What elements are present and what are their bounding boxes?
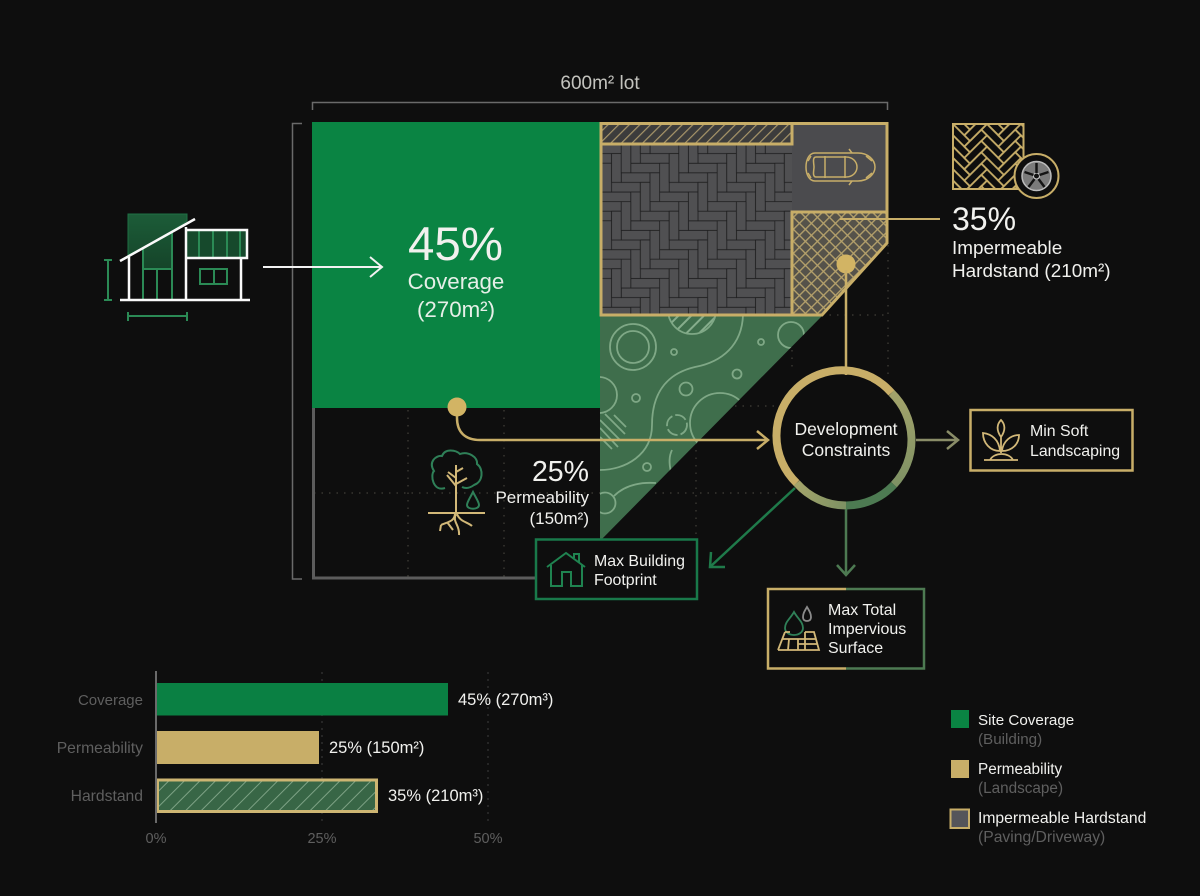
arrow: to building footprint <box>710 488 795 567</box>
bar chart <box>57 671 553 847</box>
hardstand percentage: 35% <box>952 201 1016 237</box>
connector: hardstand to constraints <box>836 254 856 375</box>
herringbone paving <box>600 144 792 315</box>
dotted grid <box>314 245 888 577</box>
axis labels <box>146 831 503 847</box>
soft landscaping label: Landscaping <box>1030 443 1120 460</box>
box: max total impervious surface <box>768 589 924 668</box>
diagram: development constraints ring <box>776 370 912 506</box>
coverage percentage: 45% <box>408 218 503 271</box>
legend <box>950 710 1146 846</box>
bar: hardstand <box>71 780 483 812</box>
legend: hardstand: (Paving/Driveway) <box>978 829 1105 846</box>
impervious surface label: Surface <box>828 640 883 657</box>
icon: seedling <box>983 420 1019 460</box>
lot width dimension <box>312 102 888 110</box>
constraints label <box>794 419 898 460</box>
bar: permeability: 25% (150m²) <box>329 739 424 757</box>
connector: coverage to constraints <box>448 398 768 449</box>
lot width label: 600m² lot <box>560 73 640 94</box>
axis labels: 25% <box>307 831 337 847</box>
building footprint label: Max Building <box>594 553 685 570</box>
bar: hardstand: Hardstand <box>71 788 143 805</box>
bar: hardstand: 35% (210m³) <box>388 787 483 805</box>
permeability percentage: 25% <box>532 456 589 488</box>
arrow: to soft landscaping <box>916 431 958 449</box>
legend: hardstand: Impermeable Hardstand <box>978 810 1146 827</box>
legend: site coverage <box>951 710 1074 748</box>
legend: permeability: (Landscape) <box>978 780 1063 797</box>
bar: permeability <box>57 731 424 764</box>
bar: coverage <box>78 683 553 716</box>
box: min soft landscaping <box>970 410 1132 470</box>
hardstand outlines <box>601 124 887 315</box>
icon: house elevation <box>104 214 250 321</box>
bar: permeability: Permeability <box>57 740 143 757</box>
building footprint label: Footprint <box>594 572 657 589</box>
panel: permeable landscape triangle <box>600 316 822 538</box>
hardstand label: Impermeable <box>952 238 1062 259</box>
impervious surface label <box>828 602 906 657</box>
box: max building footprint <box>536 540 697 599</box>
axis labels: 0% <box>146 831 167 847</box>
building footprint label <box>594 553 685 589</box>
soft landscaping label: Min Soft <box>1030 423 1089 440</box>
legend: site coverage: (Building) <box>978 731 1042 748</box>
permeability area: (150m²) <box>529 509 589 528</box>
arrow: house to coverage <box>263 257 382 277</box>
soft landscaping label <box>1030 423 1120 460</box>
legend: permeability: Permeability <box>978 761 1063 778</box>
lot outline <box>314 408 536 578</box>
icon: droplets over paving <box>778 607 819 650</box>
bar: coverage: 45% (270m³) <box>458 691 553 709</box>
arrow: to impervious surface <box>837 509 855 575</box>
hatched strip <box>600 122 792 144</box>
permeability label: Permeability <box>495 488 589 507</box>
legend: site coverage: Site Coverage <box>978 712 1074 729</box>
driveway <box>792 122 888 212</box>
legend: hardstand <box>950 810 1146 846</box>
crosshatch zone <box>792 212 888 315</box>
chart axis <box>155 671 157 823</box>
coverage label: Coverage <box>408 269 504 294</box>
leader line: hardstand <box>840 218 940 220</box>
constraints label: Constraints <box>802 440 891 460</box>
icon: house <box>547 553 585 586</box>
icon: tree with roots <box>428 450 485 535</box>
legend: permeability <box>951 760 1063 797</box>
panel: impermeable hardstand <box>600 122 888 315</box>
icon: car <box>806 149 875 185</box>
constraints label: Development <box>794 419 898 439</box>
hardstand area: Hardstand (210m²) <box>952 261 1111 282</box>
lot depth dimension <box>292 124 302 579</box>
icon: herringbone and wheel <box>953 124 1058 198</box>
impervious surface label: Impervious <box>828 621 906 638</box>
bar: coverage: Coverage <box>78 692 143 709</box>
axis labels: 50% <box>473 831 503 847</box>
coverage area: (270m²) <box>417 297 495 322</box>
panel: site coverage <box>312 122 600 408</box>
impervious surface label: Max Total <box>828 602 896 619</box>
